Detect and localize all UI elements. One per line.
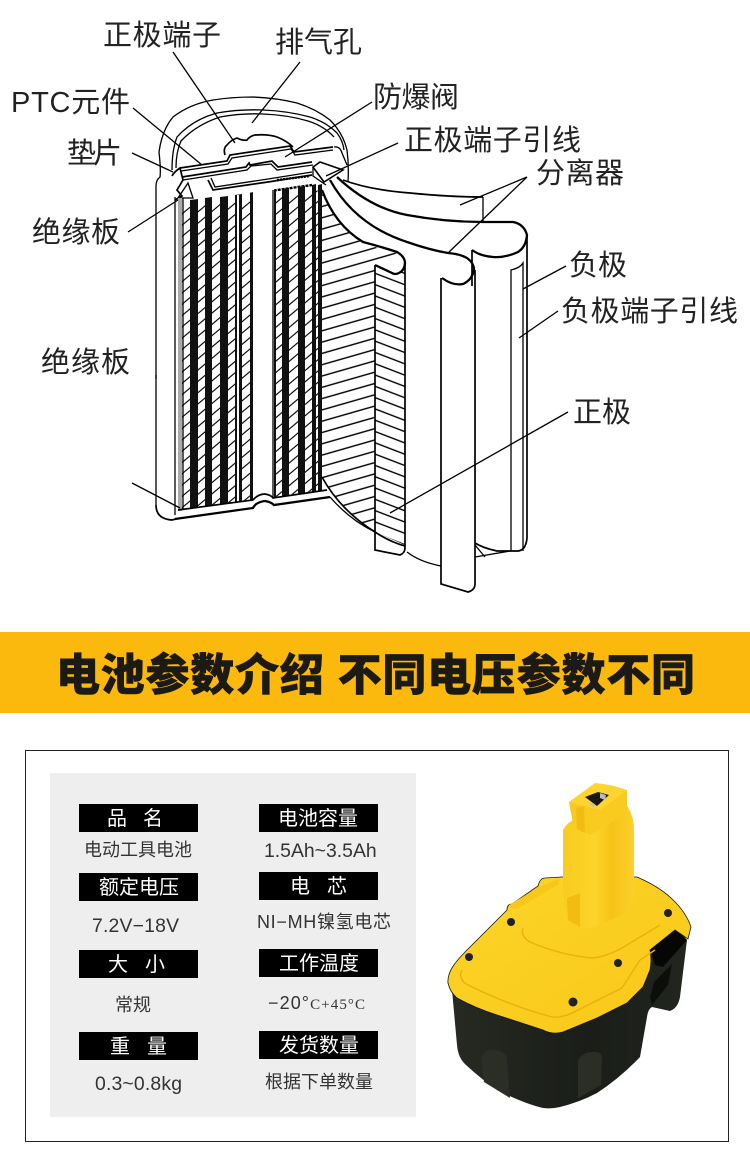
product name (79, 804, 198, 860)
battery cell (257, 872, 391, 932)
label: separator: 分离器 (536, 157, 624, 190)
battery cross-section diagram (128, 52, 568, 592)
product name: 电动工具电池 (84, 840, 192, 860)
weight: 0.3~0.8kg (95, 1073, 182, 1095)
working temperature: 工作温度 (279, 952, 359, 975)
bottom plate (175, 490, 330, 519)
battery cell: 芯 (327, 875, 347, 898)
shipping quantity: 发货数量 (279, 1034, 359, 1057)
leader lines (128, 52, 568, 513)
rated voltage: 7.2V−18V (92, 915, 179, 937)
battery cell: 电 (290, 875, 310, 898)
weight: 量 (147, 1036, 167, 1058)
rated voltage: 额定电压 (99, 876, 179, 899)
label: negative electrode: 负极 (569, 249, 627, 282)
product photo: power tool battery (448, 783, 691, 1108)
battery capacity: 电池容量 (278, 807, 358, 830)
label: positive terminal lead: 正极端子引线 (404, 124, 581, 157)
product name: 品 (107, 808, 127, 830)
working temperature (259, 949, 378, 1013)
shipping quantity (259, 1031, 378, 1092)
label: negative terminal lead: 负极端子引线 (561, 295, 738, 328)
weight (79, 1032, 198, 1095)
battery capacity: 1.5Ah~3.5Ah (264, 840, 377, 862)
battery screws (465, 909, 672, 1006)
panel: parameter table (50, 773, 416, 1117)
label: explosion-proof valve: 防爆阀 (373, 81, 459, 114)
battery column (563, 806, 634, 928)
label: PTC element: PTC元件 (11, 86, 130, 119)
working temperature: −20°C+45°C (268, 993, 365, 1013)
product name: 名 (143, 807, 163, 830)
battery black base (450, 920, 687, 1108)
battery yellow top (448, 877, 691, 1033)
shipping quantity: 根据下单数量 (265, 1072, 373, 1092)
battery head (569, 790, 627, 835)
battery terminal (585, 792, 609, 806)
wound electrode stripes (175, 184, 322, 515)
banner (0, 632, 750, 713)
size: 大 (108, 953, 128, 976)
size: 小 (145, 953, 165, 976)
label: insulating plate upper: 绝缘板 (32, 216, 120, 249)
battery cell: NI−MH镍氢电芯 (257, 912, 391, 932)
label: positive terminal: 正极端子 (103, 19, 221, 52)
top cap plates and vent (172, 135, 347, 200)
parameter frame (26, 750, 728, 1142)
banner heading: 电池参数介绍 不同电压参数不同 (56, 650, 695, 700)
can outer shell and cap (156, 97, 348, 520)
size (79, 950, 198, 1015)
size: 常规 (115, 995, 151, 1015)
diagram labels (11, 19, 738, 429)
weight: 重 (110, 1035, 130, 1058)
unrolled electrode layers (322, 177, 527, 592)
battery capacity (259, 804, 378, 862)
label: gasket: 垫片 (67, 137, 122, 170)
label: positive electrode: 正极 (573, 396, 631, 429)
label: insulating plate lower: 绝缘板 (41, 346, 130, 379)
rated voltage (79, 873, 198, 937)
label: vent: 排气孔 (275, 26, 362, 59)
